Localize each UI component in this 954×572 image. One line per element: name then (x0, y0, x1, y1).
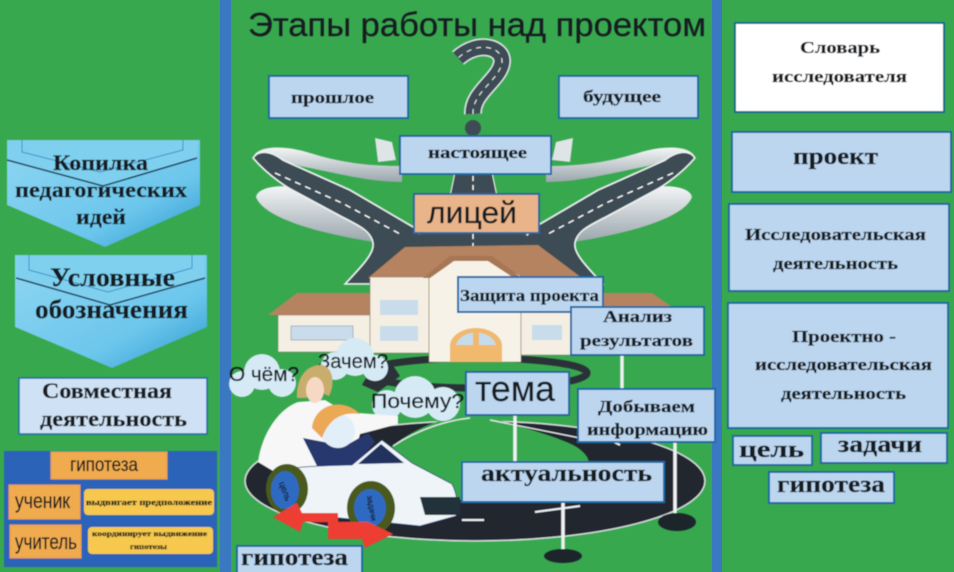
legend: ученик action: выдвигает предположение (86, 498, 213, 507)
legend: учитель action: гипотезы (130, 542, 167, 551)
box: Анализ результатов: Анализ (603, 307, 672, 326)
legend heading: гипотеза (51, 452, 167, 479)
box: будущее: будущее (583, 87, 662, 106)
box: Защита проекта: Защита проекта (460, 286, 600, 305)
box: Совместная деятельность (19, 378, 207, 434)
illustration: woman and child in car: задачи (365, 495, 378, 522)
box: цель (733, 436, 812, 465)
box: гипотеза right: гипотеза (777, 472, 885, 498)
panel: pocket Условные обозначения: Условные (50, 263, 175, 292)
box: лицей: лицей (427, 195, 517, 230)
legend: учитель action: координирует выдвижение (92, 529, 208, 538)
panel: legend гипотеза (4, 451, 217, 567)
box: актуальность (462, 461, 664, 502)
box: Анализ результатов (571, 307, 704, 355)
box: прошлое (269, 76, 408, 118)
box: актуальность: актуальность (481, 461, 652, 487)
right blue divider (712, 0, 722, 572)
box: проект (732, 132, 951, 192)
box: Словарь исследователя: Словарь (800, 38, 880, 57)
left road group (253, 138, 430, 284)
right road group (518, 138, 695, 284)
illustration: lyceum building (268, 245, 672, 362)
title: Этапы работы над проектом (248, 6, 706, 43)
legend: ученик action (84, 489, 214, 515)
box: Проектно-исследовательская деятельность: Проектно - (792, 327, 896, 346)
cloud: Зачем: Зачем? (318, 351, 388, 373)
box: будущее (559, 76, 698, 118)
box: Исследовательская деятельность: деятельность (773, 254, 898, 273)
box: лицей (414, 194, 539, 233)
box: Добываем информацию: информацию (587, 420, 708, 439)
legend heading: гипотеза: гипотеза (70, 455, 138, 476)
box: Исследовательская деятельность: Исследовательская (745, 225, 926, 244)
panel: pocket Копилка педагогических идей (7, 140, 200, 247)
illustration: branching roads (253, 138, 695, 284)
cloud: Почему: Почему? (371, 391, 464, 413)
box: Словарь исследователя: исследователя (772, 67, 907, 86)
icon: road question mark (458, 47, 502, 136)
legend: учитель: учитель (15, 531, 77, 554)
box: гипотеза bottom: гипотеза (241, 545, 348, 571)
legend: ученик: ученик (15, 490, 71, 513)
box: Защита проекта (458, 277, 603, 312)
panel: pocket Условные обозначения (15, 255, 207, 368)
left blue divider (220, 0, 231, 572)
panel: pocket Копилка педагогических идей: идей (76, 204, 126, 229)
cloud: Зачем (318, 338, 388, 381)
box: настоящее: настоящее (428, 143, 528, 162)
panel: pocket Условные обозначения: обозначения (35, 295, 188, 324)
panel: pocket Копилка педагогических идей: Копилка (53, 150, 148, 175)
arrow: red double arrow (273, 503, 393, 548)
box: тема: тема (475, 368, 556, 409)
legend: учитель action (88, 527, 213, 554)
box: прошлое: прошлое (291, 88, 375, 107)
legend: ученик (9, 485, 80, 519)
box: задачи (821, 432, 947, 463)
illustration: woman and child in car (258, 365, 460, 535)
box: Проектно-исследовательская деятельность (728, 303, 948, 428)
legend: учитель (10, 525, 81, 558)
box: задачи: задачи (838, 432, 922, 458)
box: Проектно-исследовательская деятельность: деятельность (781, 384, 906, 403)
box: проект: проект (793, 144, 878, 170)
cloud: О чём: О чём? (229, 364, 299, 386)
box: Словарь исследователя (735, 23, 944, 112)
panel: pocket Копилка педагогических идей: педагогических (15, 177, 187, 202)
cloud: О чём (229, 354, 299, 397)
illustration: poles (515, 355, 696, 563)
box: Проектно-исследовательская деятельность: исследовательская (755, 355, 932, 374)
box: Анализ результатов: результатов (580, 331, 693, 350)
box: Совместная деятельность: деятельность (40, 406, 187, 431)
illustration: race track (245, 358, 705, 541)
box: Добываем информацию (578, 389, 715, 442)
box: настоящее (400, 136, 551, 174)
box: тема (466, 368, 569, 415)
box: Добываем информацию: Добываем (598, 397, 696, 416)
box: Исследовательская деятельность (729, 204, 949, 291)
cloud: Почему (371, 376, 464, 421)
box: Совместная деятельность: Совместная (42, 378, 172, 403)
box: гипотеза right (769, 472, 894, 503)
illustration: woman and child in car: цель (277, 480, 293, 502)
box: цель: цель (739, 437, 804, 463)
